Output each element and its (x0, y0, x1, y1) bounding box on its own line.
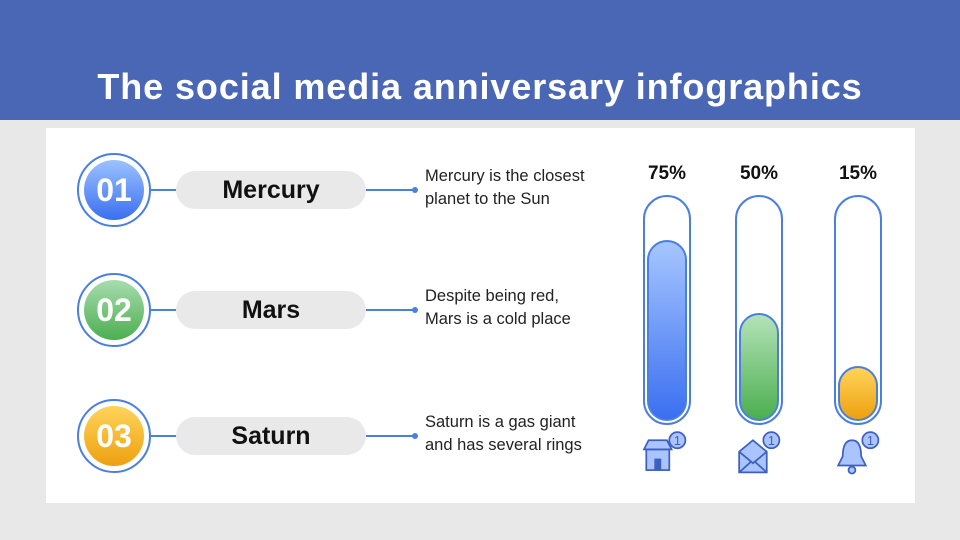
panel: content (46, 128, 915, 503)
description 2: Despite being red, (425, 287, 559, 305)
number circle 02 (77, 273, 151, 347)
row 2: Mars (77, 273, 571, 347)
tube (643, 195, 691, 425)
tube (834, 195, 882, 425)
pill: Mars: Mars (242, 296, 300, 324)
description 3: and has several rings (425, 436, 582, 454)
header bar (0, 0, 960, 120)
description 1 (425, 167, 585, 208)
label 50%: 50% (740, 163, 778, 184)
icon: bell: 1 (867, 434, 874, 448)
icon: bell (836, 431, 880, 474)
number circle 02: 02 (96, 292, 132, 328)
pill: Mars (176, 291, 366, 329)
pill: Saturn (176, 417, 366, 455)
pill: Mercury (176, 171, 366, 209)
row 1: Mercury (77, 153, 585, 227)
title: The social media anniversary infographics (97, 66, 863, 107)
bar 3: 15% (834, 163, 882, 474)
number circle 03 (77, 399, 151, 473)
number circle 03: 03 (96, 418, 132, 454)
description 1: planet to the Sun (425, 190, 550, 208)
bar 2: 50% (735, 163, 783, 474)
tube (735, 195, 783, 425)
label 75%: 75% (648, 163, 686, 184)
icon: mail (738, 431, 780, 474)
description 1: Mercury is the closest (425, 167, 585, 185)
number circle 01: 01 (96, 172, 132, 208)
description 2: Mars is a cold place (425, 310, 571, 328)
description 3: Saturn is a gas giant (425, 413, 575, 431)
pill: Mercury: Mercury (222, 176, 320, 204)
description 3 (425, 413, 582, 454)
label 15%: 15% (839, 163, 877, 184)
pill: Saturn: Saturn (231, 422, 311, 450)
icon: shop: 1 (674, 434, 681, 448)
row 3: Saturn (77, 399, 582, 473)
description 2 (425, 287, 571, 328)
bar 1: 75% (642, 163, 691, 471)
icon: shop (642, 431, 686, 471)
number circle 01 (77, 153, 151, 227)
icon: mail: 1 (768, 434, 775, 448)
